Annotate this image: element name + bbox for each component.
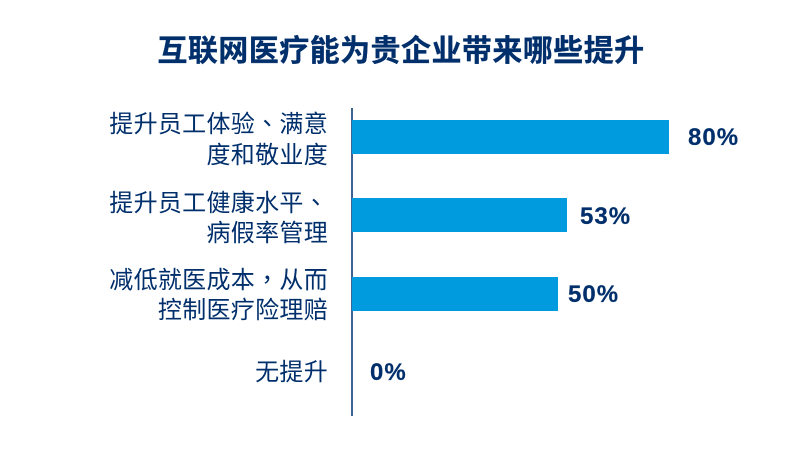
value: 50%: 50% — [568, 281, 619, 308]
label: lower cost — [109, 260, 328, 324]
value: 53%: 53% — [580, 203, 631, 230]
label: lower cost: 减低就医成本，从而 — [109, 260, 328, 295]
label: employee health — [109, 183, 328, 247]
chart: horizontal bars — [109, 104, 739, 416]
bar: 80% — [352, 120, 669, 154]
label: employee experience: 提升员工体验、满意 — [109, 104, 328, 139]
label: lower cost: 控制医疗险理赔 — [158, 297, 328, 324]
title: 互联网医疗能为贵企业带来哪些提升 — [157, 35, 645, 68]
label: no improvement: 无提升 — [255, 359, 328, 386]
axis line — [351, 108, 352, 416]
label: employee health: 病假率管理 — [206, 220, 328, 247]
label: employee experience — [109, 104, 328, 169]
value: 0%: 0% — [370, 359, 407, 386]
bar: 53% — [352, 198, 567, 232]
label: employee health: 提升员工健康水平、 — [109, 183, 328, 218]
label: employee experience: 度和敬业度 — [206, 142, 328, 169]
bar: 50% — [352, 277, 558, 311]
value: 80%: 80% — [688, 124, 739, 151]
